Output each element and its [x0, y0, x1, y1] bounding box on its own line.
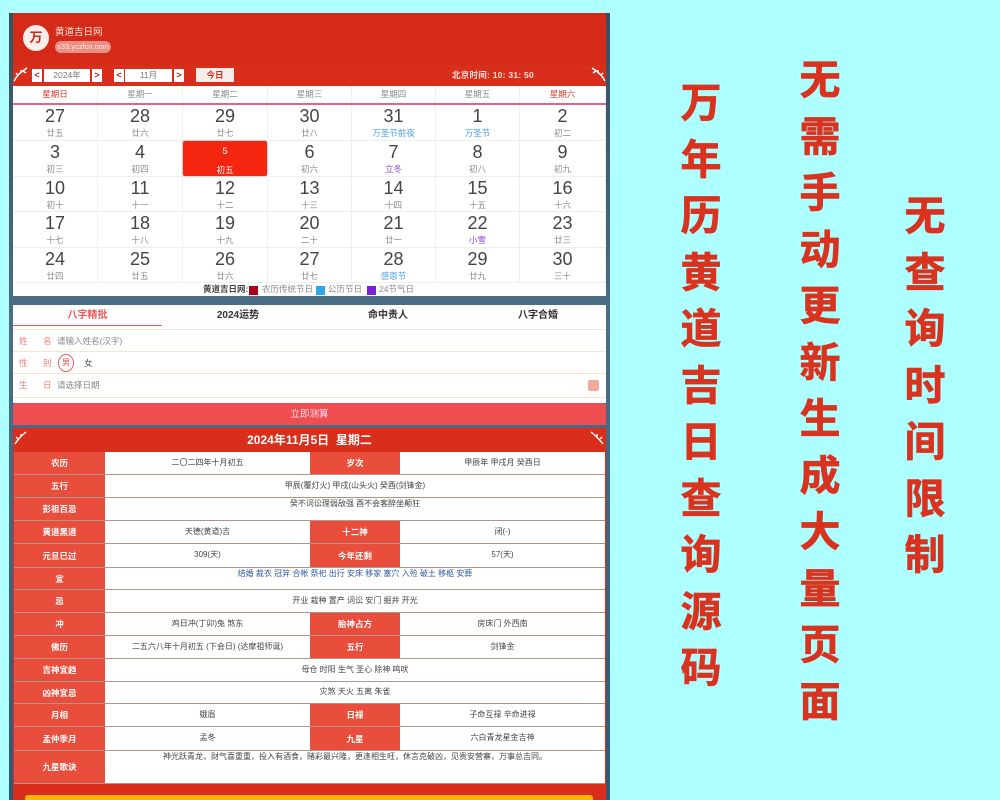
slogan column: perpetual calendar source: 历 [680, 193, 722, 239]
row: nine star verse [14, 751, 605, 784]
calendar grid: 11 [131, 178, 149, 198]
calendar grid: 立冬 [385, 164, 402, 174]
calendar legend: 公历节日 [328, 284, 362, 294]
calendar grid: 廿八 [301, 128, 318, 138]
row: suitable: 结婚 裁衣 冠笄 合帐 祭祀 出行 安床 移家 塞穴 入殓 破土 移柩 安葬 [238, 569, 472, 578]
weekday header: 星期日 [42, 89, 68, 99]
year selector: > [94, 70, 100, 80]
row: days passed: 元旦已过 [42, 550, 76, 560]
calendar grid: 万圣节 [465, 128, 490, 138]
calendar grid: 廿四 [46, 271, 64, 281]
calendar grid: 18 [130, 213, 150, 233]
site url pill [55, 41, 111, 53]
calendar grid: 十四 [385, 200, 402, 210]
slogan column: no query time limit: 限 [904, 476, 946, 522]
calendar grid: 14 [383, 178, 404, 198]
row: buddhist calendar: 五行 [346, 642, 364, 652]
calendar grid: 24 [45, 249, 65, 269]
slogan column: no query time limit: 间 [904, 419, 946, 465]
row: days passed: 57(天) [491, 550, 514, 559]
almanac date heading: 2024年11月5日 星期二 [247, 433, 372, 447]
calendar grid: 廿三 [554, 235, 571, 245]
row: lunar date: 二〇二四年十月初五 [172, 458, 244, 466]
icon: logo seal: 万 [29, 30, 42, 45]
calendar grid: 10 [45, 178, 65, 198]
calendar grid: 6 [304, 142, 314, 162]
calendar grid: 12 [215, 178, 235, 198]
slogan column: perpetual calendar source: 黄 [680, 250, 722, 296]
row: clash: 鸡日冲(丁卯)兔 煞东 [172, 618, 243, 628]
calendar grid: 19 [215, 213, 235, 233]
calendar grid: 十二 [216, 200, 234, 210]
calendar grid: 十九 [216, 235, 234, 245]
calendar grid: 9 [557, 142, 568, 162]
site name: 黄道吉日网 [55, 27, 103, 38]
screenshot panel: calendar page [9, 13, 610, 800]
calendar toolbar [13, 65, 606, 86]
row: five elements [14, 475, 605, 498]
slogan column: no manual update: 生 [800, 396, 840, 442]
row: moon phase [14, 704, 605, 727]
row: five elements: 甲辰(覆灯火) 甲戌(山头火) 癸酉(剑锋金) [285, 480, 425, 490]
slogan column: perpetual calendar source: 码 [680, 645, 722, 691]
slogan column: perpetual calendar source [680, 80, 722, 691]
field: name [13, 329, 606, 352]
beijing time: 北京时间: 10: 31: 50 [452, 70, 534, 80]
slogan column: no manual update [800, 57, 840, 724]
calendar grid: 31 [383, 106, 404, 126]
row: moon phase: 子命互禄 辛命进禄 [469, 710, 536, 718]
calendar grid: 30 [299, 106, 320, 126]
panel: almanac table [13, 428, 606, 800]
almanac rows [14, 452, 605, 784]
row: buddhist calendar: 二五六八年十月初五 (下会日) (达摩祖师诞) [132, 642, 283, 650]
slogan column: no query time limit [904, 193, 946, 578]
calendar grid: 十一 [131, 200, 148, 210]
page header with logo [13, 13, 606, 65]
slogan column: no manual update: 需 [800, 114, 840, 160]
row: five elements: 五行 [51, 481, 68, 491]
calendar legend: 农历传统节日 [262, 284, 313, 294]
calendar grid: 25 [130, 249, 150, 269]
field: birthday: 请选择日期 [57, 380, 100, 390]
month selector [114, 69, 184, 82]
row: clash: 冲 [55, 619, 64, 629]
calendar grid: 小雪 [469, 235, 486, 245]
weekday header: 星期六 [550, 89, 575, 99]
row: clash [14, 613, 605, 636]
slogan column: perpetual calendar source: 吉 [680, 362, 722, 408]
slogan column: perpetual calendar source: 源 [680, 588, 722, 634]
calendar grid: 28 [383, 249, 404, 269]
form body [13, 326, 606, 403]
slogan column: no query time limit: 查 [904, 250, 946, 296]
calendar grid: 15 [467, 178, 488, 198]
row: avoid: 忌 [55, 596, 64, 606]
tabs: 八字合婚 [518, 310, 558, 321]
calendar grid: 初五 [216, 165, 234, 175]
row: huangdao: 闭(-) [494, 526, 510, 536]
slogan column: no manual update: 成 [800, 452, 840, 498]
slogan column: no manual update: 更 [800, 283, 840, 329]
calendar grid: 29 [215, 106, 235, 126]
calendar grid: 28 [130, 106, 150, 126]
field: gender: 女 [84, 358, 93, 368]
field: name: 名 [43, 336, 52, 346]
calendar grid: 20 [299, 213, 320, 233]
slogan column: no manual update: 动 [800, 226, 840, 272]
row: huangdao: 黄道黑道 [42, 527, 76, 537]
calendar grid: 十七 [46, 235, 64, 245]
field: birthday: 日 [43, 380, 52, 390]
field: gender: 别 [43, 358, 52, 368]
calendar grid: 廿一 [385, 235, 402, 245]
year selector [32, 69, 102, 82]
weekday header: 星期一 [127, 89, 153, 99]
month selector: < [116, 70, 122, 80]
calendar legend: 黄道吉日网: [203, 284, 248, 294]
row: buddhist calendar: 剑锋金 [490, 642, 514, 650]
calendar grid: 廿五 [46, 128, 64, 138]
row: huangdao: 天德(黄道)吉 [185, 526, 230, 536]
site url pill: s33.yczfcn.com [57, 42, 109, 51]
calendar grid: 十五 [469, 200, 486, 210]
row: clash: 胎神占方 [338, 619, 372, 629]
row: season month: 六白青龙星金吉神 [470, 733, 534, 742]
row: season month: 孟仲季月 [42, 734, 76, 744]
row: lunar date: 甲辰年 甲戌月 癸酉日 [464, 458, 541, 466]
icon: logo seal [23, 25, 49, 51]
calendar grid: 22 [467, 213, 488, 233]
slogan column: no manual update: 页 [800, 622, 840, 668]
calendar grid: 初十 [46, 200, 64, 210]
calendar grid: 27 [45, 106, 65, 126]
slogan column: perpetual calendar source: 道 [680, 306, 722, 352]
slogan column: no manual update: 手 [800, 170, 840, 216]
tabs [13, 305, 606, 326]
row: moon phase: 月相 [51, 710, 68, 720]
calendar grid: 7 [388, 142, 398, 162]
slogan column: no manual update: 面 [800, 678, 840, 724]
today button: 今日 [206, 70, 224, 80]
tabs: 命中贵人 [368, 310, 408, 321]
slogan column: no query time limit: 时 [904, 362, 946, 408]
calendar grid: 初八 [469, 164, 486, 174]
slogan column: perpetual calendar source: 询 [680, 532, 722, 578]
row: huangdao [14, 521, 605, 544]
calendar grid: 初四 [131, 164, 148, 174]
calendar grid: 29 [467, 249, 488, 269]
row: buddhist calendar [14, 636, 605, 659]
calendar grid: 16 [552, 178, 573, 198]
weekday header: 星期二 [212, 89, 238, 99]
row: suitable: 宜 [55, 574, 64, 584]
row: suitable [14, 568, 605, 590]
calendar grid: 2 [557, 106, 568, 126]
calendar grid: 5 [222, 146, 228, 157]
slogan column: no manual update: 量 [800, 566, 840, 612]
row: buddhist calendar: 佛历 [51, 642, 68, 652]
calendar grid [13, 105, 606, 283]
calendar grid: 3 [50, 142, 60, 162]
row: pengzu: 癸不词讼理弱敌强 酉不会客醉坐颠狂 [290, 499, 420, 508]
row: moon phase: 日禄 [346, 710, 364, 720]
row: pengzu: 彭祖百忌 [42, 504, 76, 514]
field: gender [13, 352, 606, 374]
icon: right blossom ornament [592, 67, 606, 82]
calendar grid: 廿七 [301, 271, 318, 281]
icon: heading ornaments [14, 432, 604, 444]
panel: bazi form [13, 305, 606, 425]
calendar grid: 十八 [131, 235, 148, 245]
row: avoid: 开业 栽种 置产 词讼 安门 掘井 开光 [292, 596, 418, 604]
weekday header: 星期三 [297, 89, 322, 99]
yellow bar [25, 795, 593, 800]
calendar grid: 26 [215, 249, 235, 269]
row: huangdao: 十二神 [342, 527, 368, 537]
year selector: < [34, 70, 40, 80]
slogan column: no query time limit: 制 [904, 532, 946, 578]
row: lunar date: 农历 [51, 458, 68, 468]
month selector: > [176, 70, 182, 80]
row: lunar date [14, 452, 605, 475]
row: lucky gods: 吉神宜趋 [42, 665, 76, 675]
row: season month: 九星 [346, 734, 364, 744]
row: days passed [14, 544, 605, 568]
calendar grid: 廿六 [216, 271, 234, 281]
calendar grid: 初二 [554, 128, 571, 138]
row: lucky gods [14, 659, 605, 682]
field: name: 请输入姓名(汉字) [57, 336, 122, 346]
row: evil gods: 凶神宜忌 [42, 688, 76, 698]
weekday header [13, 86, 606, 105]
calendar grid: 4 [135, 142, 145, 162]
slogan column: no query time limit: 询 [904, 306, 946, 352]
slogan column: no manual update: 无 [800, 57, 840, 103]
submit button [13, 403, 606, 425]
calendar grid: 23 [552, 213, 573, 233]
tabs: 2024运势 [217, 310, 259, 321]
row: days passed: 309(天) [194, 550, 221, 559]
slogan column: perpetual calendar source: 万 [680, 80, 722, 126]
row: evil gods [14, 682, 605, 704]
calendar grid: 廿五 [131, 271, 148, 281]
slogan column: no manual update: 大 [800, 509, 840, 555]
calendar legend: 24节气日 [379, 284, 414, 294]
today button [196, 68, 234, 82]
row: nine star verse: 九星歌诀 [42, 762, 76, 772]
row: moon phase: 娥眉 [200, 710, 216, 718]
calendar grid: 初六 [301, 164, 318, 174]
calendar grid: 廿六 [131, 128, 148, 138]
calendar grid: 二十 [301, 235, 318, 245]
row: season month: 孟冬 [200, 733, 216, 742]
calendar grid: 21 [383, 213, 404, 233]
calendar grid: 1 [472, 106, 482, 126]
row: lucky gods: 母仓 时阳 生气 圣心 除神 鸣吠 [301, 664, 409, 674]
row: evil gods: 灾煞 天火 五离 朱雀 [320, 687, 390, 696]
slogan column: perpetual calendar source: 日 [680, 419, 722, 465]
calendar grid: 十六 [554, 200, 571, 210]
tabs: 八字精批 [68, 310, 108, 321]
calendar grid: 廿九 [469, 271, 486, 281]
calendar grid: 三十 [554, 271, 571, 281]
row: season month [14, 727, 605, 751]
row: clash: 房床门 外西南 [477, 618, 528, 628]
field: gender: 性 [19, 358, 28, 368]
month selector: 11月 [140, 70, 157, 80]
row: lunar date: 岁次 [346, 458, 364, 468]
calendar grid: 13 [299, 178, 320, 198]
field: birthday: 生 [19, 380, 28, 390]
calendar grid: 感恩节 [381, 271, 406, 281]
calendar grid: 初九 [554, 164, 571, 174]
row: nine star verse: 神光跃青龙，财气喜重重，投入有酒食，赌彩最兴隆，更逢相生旺，休言克破凶，见贵安营寨，万事总吉同。 [163, 752, 547, 761]
calendar grid: 17 [45, 213, 65, 233]
weekday header: 星期四 [381, 89, 406, 99]
icon: left blossom ornament [13, 67, 28, 82]
field: name: 姓 [19, 336, 28, 346]
calendar grid: 初三 [46, 164, 64, 174]
calendar grid: 27 [299, 249, 320, 269]
slogan column: no query time limit: 无 [904, 193, 946, 239]
year selector: 2024年 [53, 70, 81, 80]
slogan column: no manual update: 新 [800, 340, 840, 386]
row: days passed: 今年还剩 [338, 550, 372, 560]
calendar grid: 十三 [301, 200, 318, 210]
calendar legend [13, 283, 606, 296]
field: gender: 男 [62, 358, 70, 367]
calendar grid: 8 [472, 142, 482, 162]
submit button: 立即测算 [290, 409, 328, 420]
row: pengzu [14, 498, 605, 521]
slogan column: perpetual calendar source: 年 [680, 136, 722, 182]
weekday header: 星期五 [465, 89, 490, 99]
row: avoid [14, 590, 605, 613]
slogan column: perpetual calendar source: 查 [680, 476, 722, 522]
calendar grid: 廿七 [216, 128, 234, 138]
calendar grid: 30 [552, 249, 573, 269]
calendar grid: 万圣节前夜 [372, 128, 415, 138]
field: birthday [13, 374, 606, 398]
